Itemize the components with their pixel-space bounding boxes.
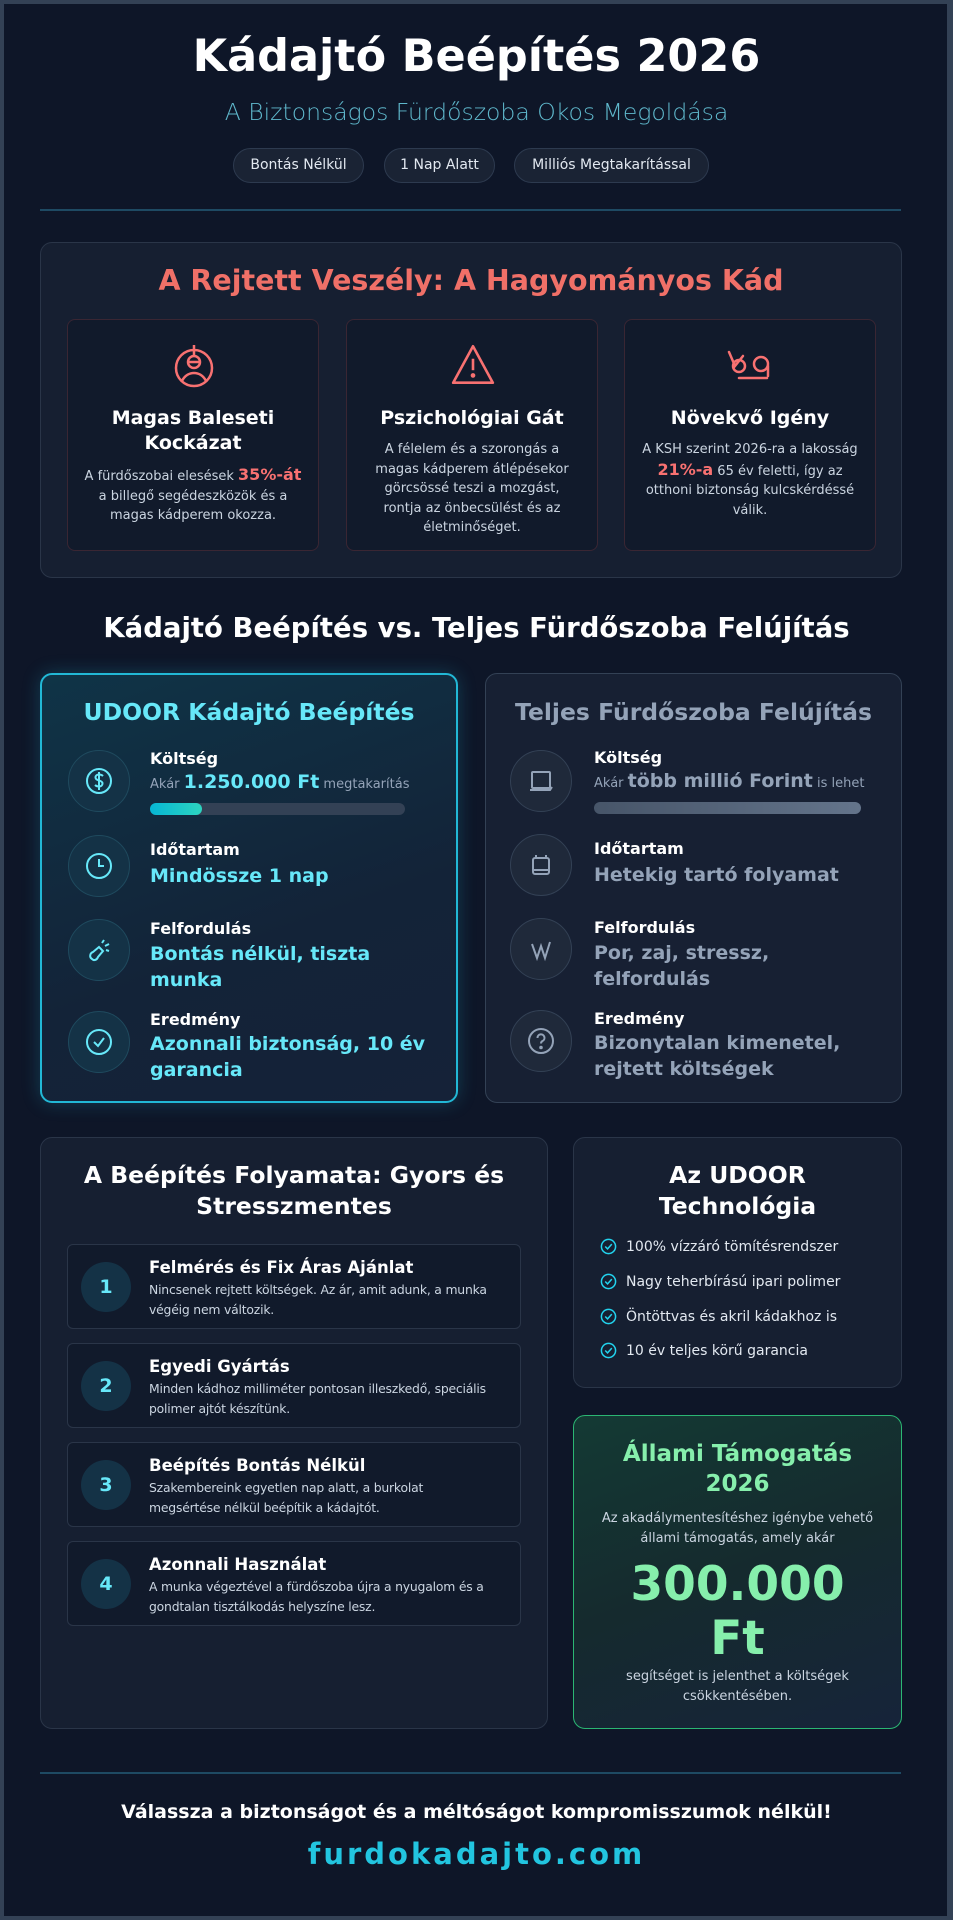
card: growing demand bbox=[624, 319, 876, 551]
row: disruption: Por, zaj, stressz, bbox=[594, 942, 769, 964]
step 3: Szakembereink egyetlen nap alatt, a burkolat bbox=[149, 1480, 423, 1495]
card: accident risk: a billegő segédeszközök és a bbox=[99, 488, 287, 504]
pill: 1 nap: 1 Nap Alatt bbox=[400, 157, 479, 173]
row: disruption bbox=[68, 919, 370, 991]
pill: 1 nap bbox=[384, 148, 495, 183]
title: Kádajtó Beépítés 2026 bbox=[193, 31, 760, 82]
row: result: Eredmény bbox=[150, 1010, 240, 1029]
row: cost: Akár 1.250.000 Ft megtakarítás bbox=[150, 771, 409, 793]
danger heading: A Rejtett Veszély: A Hagyományos Kád bbox=[158, 264, 784, 297]
step 1: Felmérés és Fix Áras Ajánlat bbox=[149, 1258, 413, 1277]
card: accident risk: magas kádperem okozza. bbox=[110, 508, 276, 523]
row: cost: Költség bbox=[594, 748, 662, 767]
row: duration: Időtartam bbox=[594, 839, 684, 858]
tech heading bbox=[659, 1161, 816, 1220]
card: growing demand: A KSH szerint 2026-ra a lakosság 21%-a 65 év feletti, így az otthoni biztonság kulcskérdéssé válik. bbox=[642, 442, 858, 518]
subtitle: A Biztonságos Fürdőszoba Okos Megoldása bbox=[225, 98, 728, 126]
support text 2: segítséget is jelenthet a költségek csökkentésében. bbox=[626, 1669, 849, 1704]
step 3: Beépítés Bontás Nélkül bbox=[149, 1456, 365, 1475]
row: duration: Időtartam bbox=[150, 840, 240, 859]
card: psychological barrier bbox=[346, 319, 598, 551]
tech heading: Technológia bbox=[659, 1192, 816, 1220]
row: disruption: munka bbox=[150, 969, 222, 991]
row: cost: Költség bbox=[150, 749, 218, 768]
card: accident risk: A fürdőszobai elesések 35%-át bbox=[85, 465, 301, 484]
row: disruption: Felfordulás bbox=[150, 919, 251, 938]
step 1: 1 bbox=[99, 1276, 113, 1298]
row: disruption bbox=[510, 918, 769, 990]
card: accident risk: Kockázat bbox=[144, 432, 242, 454]
tech item 4: 10 év teljes körű garancia bbox=[626, 1342, 808, 1358]
support text: Az akadálymentesítéshez igénybe vehető állami támogatás, amely akár bbox=[602, 1511, 873, 1546]
panel: state support bbox=[573, 1415, 902, 1729]
panel: process bbox=[40, 1137, 548, 1729]
row: disruption: felfordulás bbox=[594, 968, 710, 990]
step 3: 3 bbox=[99, 1474, 113, 1496]
row: cost bbox=[510, 748, 864, 814]
card: accident risk bbox=[67, 319, 319, 551]
card: growing demand: Növekvő Igény bbox=[671, 407, 829, 429]
step 1: Nincsenek rejtett költségek. Az ár, amit adunk, a munka végéig nem változik. bbox=[149, 1282, 487, 1317]
process heading: A Beépítés Folyamata: Gyors és bbox=[84, 1161, 504, 1189]
panel: UDOOR bbox=[40, 673, 458, 1103]
step 4: 4 bbox=[99, 1573, 113, 1595]
tech heading: Az UDOOR bbox=[669, 1161, 806, 1189]
tech item 2: Nagy teherbírású ipari polimer bbox=[626, 1274, 840, 1290]
icon: person bbox=[174, 345, 214, 388]
step 2 bbox=[67, 1343, 521, 1428]
footer url: furdokadajto.com bbox=[308, 1837, 645, 1871]
row: result bbox=[510, 1009, 840, 1080]
step 3 bbox=[67, 1442, 521, 1527]
icon: warning bbox=[452, 344, 494, 384]
step 1 bbox=[67, 1244, 521, 1329]
row: duration: Hetekig tartó folyamat bbox=[594, 864, 839, 886]
tech item 3: Öntöttvas és akril kádakhoz is bbox=[626, 1308, 837, 1324]
step 2: Minden kádhoz milliméter pontosan illeszkedő, speciális polimer ajtót készítünk. bbox=[149, 1381, 486, 1416]
step 4: A munka végeztével a fürdőszoba újra a nyugalom és a gondtalan tisztálkodás helyszíne lesz. bbox=[149, 1579, 484, 1614]
support heading bbox=[623, 1440, 852, 1497]
big number: 300.000 bbox=[630, 1557, 845, 1612]
row: result bbox=[68, 1010, 425, 1081]
panel heading: Teljes Fürdőszoba Felújítás bbox=[515, 698, 872, 726]
step 2: Egyedi Gyártás bbox=[149, 1357, 290, 1376]
card: psychological barrier: Pszichológiai Gát bbox=[380, 407, 564, 429]
step 4: Azonnali Használat bbox=[149, 1555, 326, 1574]
support heading: 2026 bbox=[705, 1471, 770, 1497]
step 3: megsértése nélkül beépítik a kádajtót. bbox=[149, 1500, 380, 1515]
row: result: garancia bbox=[150, 1059, 243, 1081]
card: psychological barrier: A félelem és a szorongás a magas kádperem átlépésekor görcsössé teszi a mozgást, rontja az önbecsülést és az életminőséget. bbox=[375, 442, 569, 535]
tech item 1: 100% vízzáró tömítésrendszer bbox=[626, 1238, 838, 1254]
panel heading: UDOOR Kádajtó Beépítés bbox=[83, 698, 414, 726]
pill: bontás nélkül: Bontás Nélkül bbox=[250, 157, 347, 173]
panel: technology bbox=[573, 1137, 902, 1388]
pill: milliós bbox=[514, 148, 709, 183]
process heading bbox=[84, 1161, 504, 1220]
big number bbox=[630, 1557, 845, 1666]
row: disruption: Bontás nélkül, tiszta bbox=[150, 943, 370, 965]
footer slogan: Válassza a biztonságot és a méltóságot kompromisszumok nélkül! bbox=[121, 1801, 832, 1823]
row: duration: Mindössze 1 nap bbox=[150, 865, 329, 887]
row: cost: Akár több millió Forint is lehet bbox=[594, 770, 864, 792]
row: result: Azonnali biztonság, 10 év bbox=[150, 1033, 425, 1055]
process heading: Stresszmentes bbox=[196, 1192, 392, 1220]
row: duration bbox=[68, 835, 329, 897]
card: accident risk: Magas Baleseti bbox=[112, 407, 274, 429]
row: result: Bizonytalan kimenetel, bbox=[594, 1032, 840, 1054]
row: result: Eredmény bbox=[594, 1009, 684, 1028]
row: cost bbox=[68, 749, 409, 815]
big number: Ft bbox=[710, 1611, 765, 1666]
panel: full renovation bbox=[485, 673, 902, 1103]
row: duration bbox=[510, 834, 839, 896]
support heading: Állami Támogatás bbox=[623, 1441, 852, 1467]
pill: bontás nélkül bbox=[233, 148, 364, 183]
step 4 bbox=[67, 1541, 521, 1626]
panel: hidden danger bbox=[40, 242, 902, 578]
comparison heading: Kádajtó Beépítés vs. Teljes Fürdőszoba Felújítás bbox=[103, 612, 850, 644]
pill: milliós: Milliós Megtakarítással bbox=[532, 157, 691, 173]
icon: elderly bbox=[728, 350, 770, 380]
row: disruption: Felfordulás bbox=[594, 918, 695, 937]
step 2: 2 bbox=[99, 1375, 113, 1397]
row: result: rejtett költségek bbox=[594, 1058, 774, 1080]
